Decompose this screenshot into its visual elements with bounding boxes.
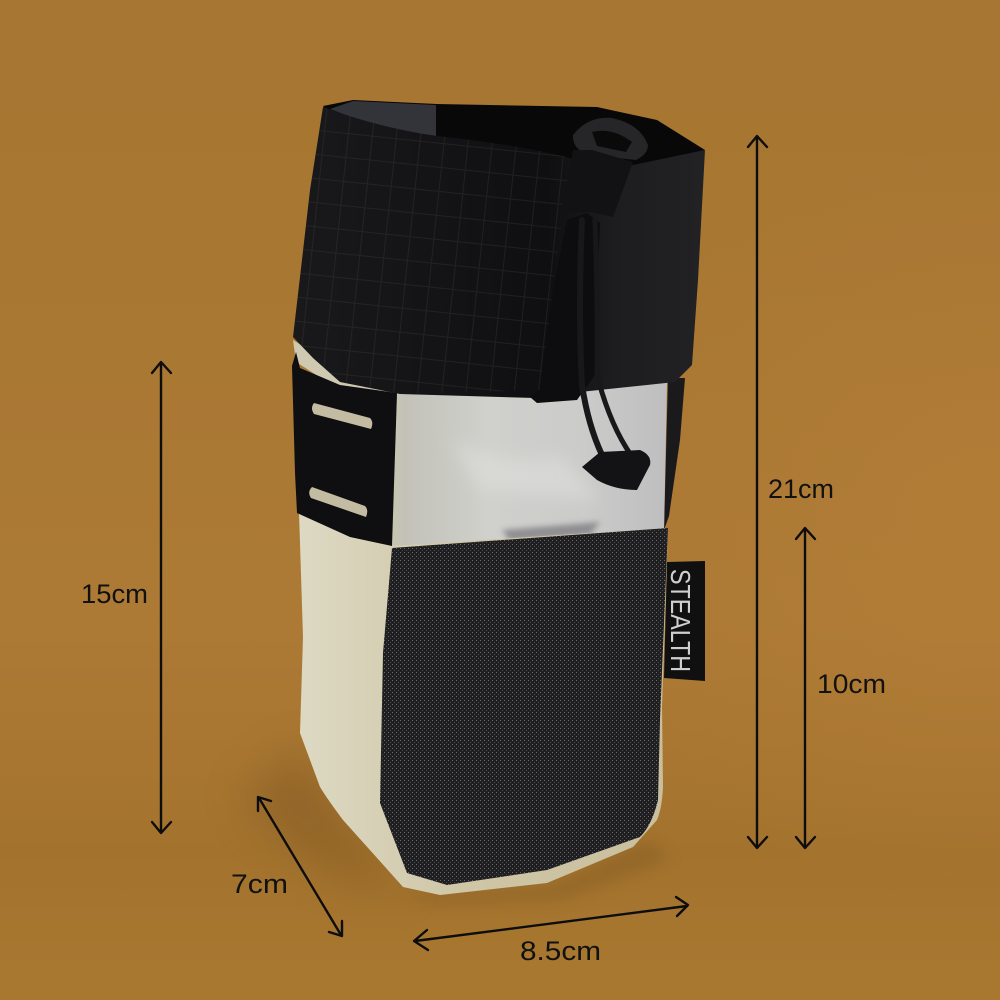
slot xyxy=(312,403,372,429)
dimension: 8.5cm width xyxy=(414,897,688,950)
ground shadow xyxy=(240,745,670,905)
bag interior xyxy=(323,100,705,170)
brand text: STEALTH xyxy=(665,569,696,672)
cord lock bottom xyxy=(582,450,650,490)
cord lock top xyxy=(560,118,648,217)
dimension: 21cm height xyxy=(748,136,767,848)
bag xyxy=(292,100,705,895)
dimension: 15cm height xyxy=(152,362,171,833)
label: 21cm: 21cm xyxy=(768,474,834,504)
label: 7cm: 7cm xyxy=(231,869,288,899)
dimension: 7cm depth xyxy=(258,797,342,936)
label: 15cm: 15cm xyxy=(81,579,148,609)
label: 8.5cm: 8.5cm xyxy=(520,936,601,966)
webbing loop tab xyxy=(530,213,600,403)
brand tag xyxy=(664,561,705,681)
slot xyxy=(309,487,367,517)
white upper panel xyxy=(391,383,667,549)
back strap right xyxy=(664,378,685,530)
dimension: 10cm height xyxy=(796,528,815,848)
mesh pocket xyxy=(380,528,668,885)
side and base white panel xyxy=(299,512,668,895)
drawcord xyxy=(580,220,631,455)
label: 10cm: 10cm xyxy=(817,669,886,699)
rolled top fold xyxy=(293,107,705,398)
webbing strip with slots xyxy=(292,340,398,546)
